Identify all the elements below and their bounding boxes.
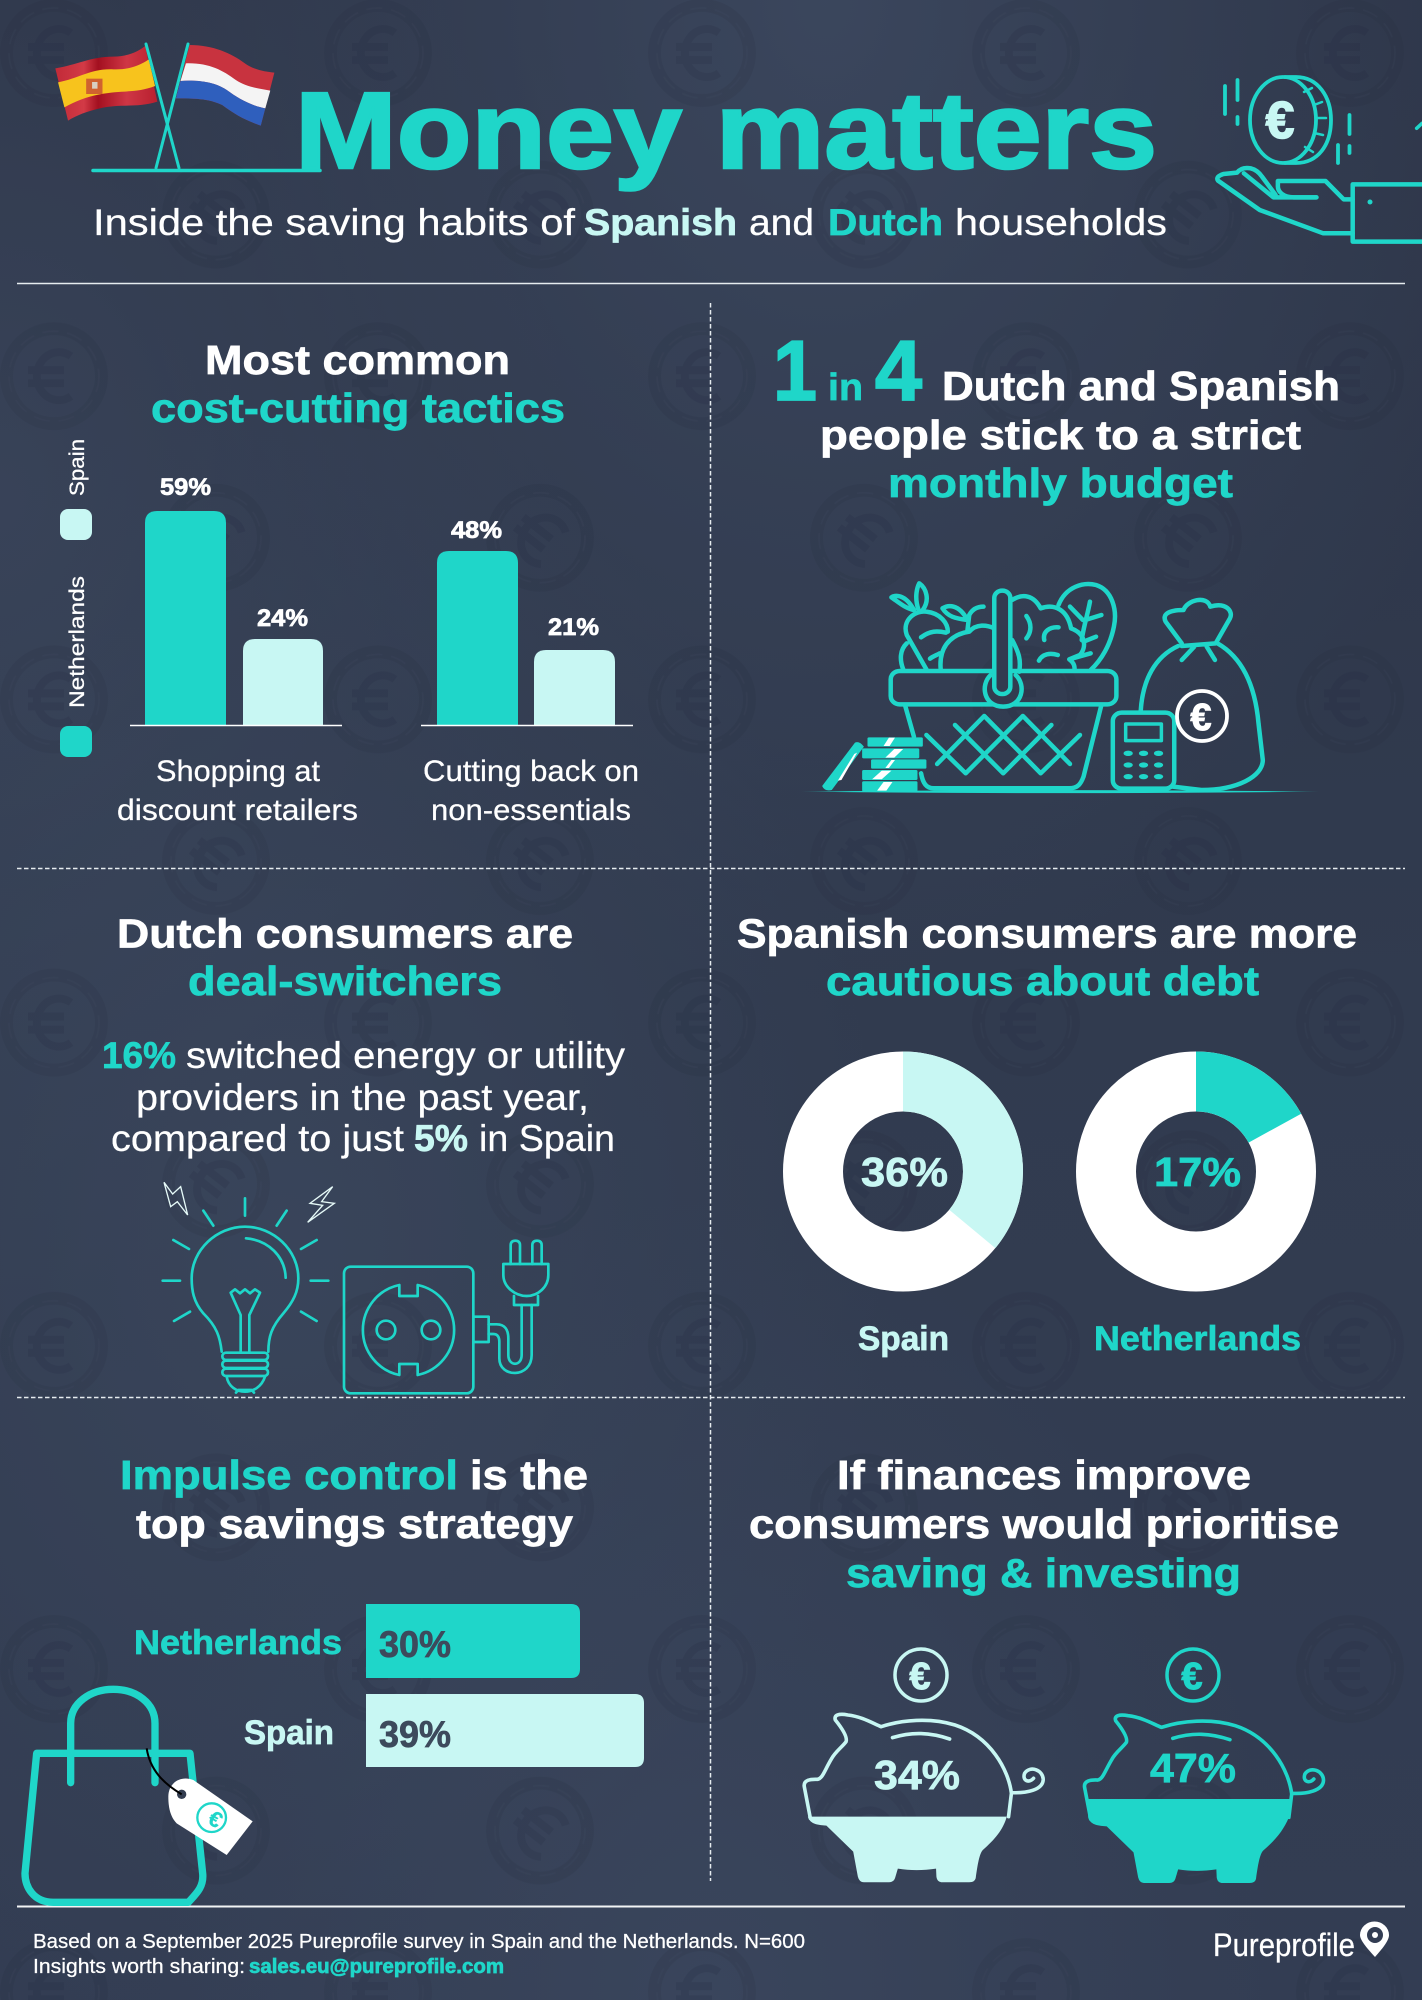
heading: deal-switchers: deal-switchers bbox=[188, 958, 502, 1004]
dividers bbox=[17, 284, 1405, 1906]
heading: cost-cutting tactics: cost-cutting tactics bbox=[151, 385, 565, 431]
panel: 1 in 4 budget bbox=[773, 324, 1340, 793]
text block: switching statistic bbox=[102, 1035, 626, 1159]
panel: cautious about debt bbox=[737, 910, 1357, 1358]
icon: piggy bank Netherlands 47% bbox=[1084, 1649, 1323, 1883]
legend: Spain bbox=[66, 439, 89, 496]
heading: impulse control: is the bbox=[470, 1452, 588, 1498]
bar chart: non-essentials bbox=[431, 794, 631, 827]
heading: cost-cutting tactics bbox=[151, 337, 565, 431]
icon: light bulb and power socket bbox=[163, 1182, 548, 1393]
heading: deal-switchers bbox=[117, 910, 573, 1004]
title: Money matters bbox=[295, 70, 1157, 192]
heading: saving and investing: If finances improve bbox=[837, 1452, 1251, 1498]
donut chart: Spain 36%: Spain bbox=[858, 1320, 949, 1358]
legend bbox=[60, 439, 92, 757]
text block: switching statistic: 5% bbox=[414, 1118, 468, 1159]
horizontal bar: Spain 39% bbox=[244, 1694, 644, 1767]
bar chart: 24% bbox=[257, 605, 308, 632]
icon: grocery basket, coins, calculator and money bag: € bbox=[1190, 697, 1212, 739]
heading: impulse control: Impulse control bbox=[120, 1452, 458, 1498]
heading: cautious about debt: Spanish consumers are more bbox=[737, 910, 1357, 956]
horizontal bar: Netherlands 30%: 30% bbox=[379, 1624, 451, 1665]
heading: cautious about debt bbox=[737, 910, 1357, 1004]
icon: coin above open hand: € bbox=[1266, 92, 1294, 150]
heading: saving and investing: consumers would prioritise bbox=[749, 1501, 1339, 1547]
icon: grocery basket, coins, calculator and money bag bbox=[801, 583, 1319, 793]
source note: Based on a September 2025 Pureprofile survey in Spain and the Netherlands. N=600 bbox=[33, 1931, 805, 1953]
text block: switching statistic: 16% bbox=[102, 1035, 176, 1076]
subtitle: Dutch bbox=[828, 202, 943, 243]
icon: piggy bank Spain 34%: € bbox=[909, 1656, 931, 1698]
icon: coin above open hand bbox=[1217, 77, 1422, 242]
icon: piggy bank Netherlands 47%: € bbox=[1181, 1656, 1203, 1698]
subtitle: households bbox=[955, 202, 1167, 243]
donut chart: Spain 36%: 36% bbox=[861, 1149, 948, 1195]
heading: impulse control bbox=[120, 1452, 588, 1547]
footer bbox=[33, 1921, 1389, 1978]
horizontal bar: Netherlands 30%: Netherlands bbox=[134, 1624, 342, 1662]
horizontal bar: Spain 39%: 39% bbox=[379, 1714, 451, 1755]
heading: 1 in 4: Dutch and Spanish bbox=[942, 363, 1340, 409]
donut chart: Spain 36% bbox=[813, 1082, 993, 1358]
text block: switching statistic: providers in the past year, bbox=[136, 1077, 589, 1118]
bar chart: discount retailers bbox=[117, 794, 358, 827]
panel: saving and investing bbox=[749, 1452, 1339, 1883]
heading: 1 in 4: monthly budget bbox=[888, 460, 1233, 506]
text block: switching statistic: switched energy or utility bbox=[186, 1035, 626, 1076]
subtitle bbox=[93, 202, 1167, 243]
heading: impulse control: top savings strategy bbox=[136, 1501, 574, 1547]
bar chart: 21% bbox=[548, 614, 599, 641]
heading: 1 in 4: in bbox=[828, 367, 863, 409]
icon: piggy bank Spain 34%: 34% bbox=[874, 1752, 960, 1798]
bar chart: 59% bbox=[160, 474, 211, 501]
heading: saving and investing: saving & investing bbox=[846, 1550, 1241, 1596]
panel: cost-cutting tactics bbox=[60, 337, 639, 827]
heading: cost-cutting tactics: Most common bbox=[205, 337, 510, 383]
donut chart: Netherlands 17%: 17% bbox=[1154, 1149, 1241, 1195]
logo: Pureprofile: Pureprofile bbox=[1213, 1927, 1355, 1963]
donut chart: Netherlands 17% bbox=[1094, 1082, 1301, 1358]
horizontal bar: Spain 39%: Spain bbox=[244, 1714, 334, 1752]
heading: cautious about debt: cautious about debt bbox=[826, 958, 1259, 1004]
heading: deal-switchers: Dutch consumers are bbox=[117, 910, 573, 956]
icon: shopping bag with price tag bbox=[25, 1689, 253, 1902]
icon: shopping bag with price tag: € bbox=[204, 1805, 227, 1833]
heading: 1 in 4: 4 bbox=[875, 324, 922, 419]
subtitle: Spanish bbox=[584, 202, 737, 243]
donut chart: Netherlands 17%: Netherlands bbox=[1094, 1320, 1301, 1358]
heading: 1 in 4 bbox=[773, 324, 1340, 506]
subtitle: and bbox=[749, 202, 814, 243]
icon: crossed flags bbox=[55, 44, 320, 170]
bar chart bbox=[117, 474, 639, 827]
icon: piggy bank Spain 34% bbox=[804, 1649, 1043, 1882]
panel: impulse control bbox=[25, 1452, 644, 1902]
text block: switching statistic: in Spain bbox=[479, 1118, 615, 1159]
horizontal bar: Netherlands 30% bbox=[134, 1604, 580, 1678]
bar chart: Cutting back on bbox=[423, 755, 639, 788]
panel: deal-switchers bbox=[102, 910, 626, 1393]
bar chart: 48% bbox=[451, 517, 502, 544]
source note bbox=[33, 1931, 805, 1978]
heading: 1 in 4: people stick to a strict bbox=[820, 412, 1301, 458]
source note: sales.eu@pureprofile.com bbox=[249, 1956, 504, 1978]
heading: saving and investing bbox=[749, 1452, 1339, 1596]
text block: switching statistic: compared to just bbox=[111, 1118, 405, 1159]
icon: piggy bank Netherlands 47%: 47% bbox=[1150, 1745, 1236, 1791]
source note: Insights worth sharing: bbox=[33, 1956, 245, 1978]
header bbox=[55, 44, 1422, 243]
legend: Netherlands bbox=[66, 576, 89, 708]
bar chart: Shopping at bbox=[156, 755, 321, 788]
heading: 1 in 4: 1 bbox=[773, 324, 817, 419]
subtitle: Inside the saving habits of bbox=[93, 202, 576, 243]
